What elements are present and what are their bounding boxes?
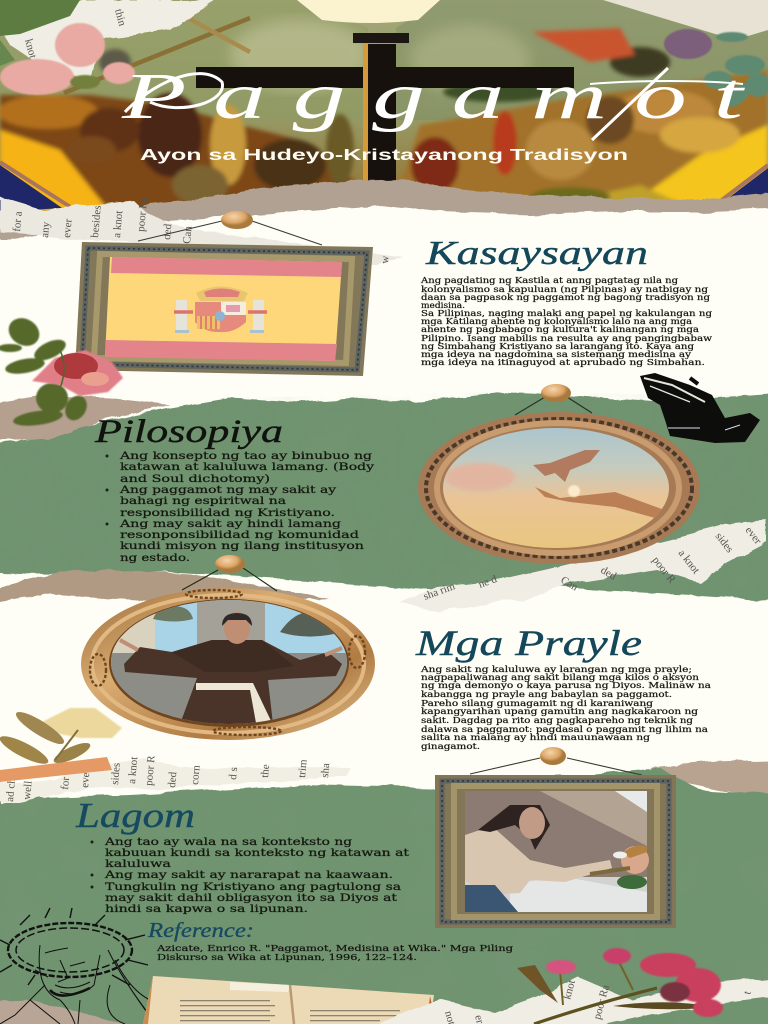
oval frame: dove and hand (418, 412, 700, 564)
heading: pilosopiya: Pilosopiya (94, 414, 283, 450)
paper strip behind flag: besides (89, 205, 104, 238)
coat of arms (174, 286, 267, 333)
icon: purple flower (664, 29, 712, 59)
paper strip right: a knot (676, 547, 702, 576)
paper strip behind flag: Can (181, 225, 195, 244)
text block: mga prayle (420, 664, 711, 751)
photo (465, 791, 649, 912)
text block: kasaysayan: ng Simbahang Kristiyano sa larangang ito. Kaya ang (421, 341, 694, 351)
paper strip with tape left: a knot (126, 756, 140, 784)
green panel: pilosopiya (0, 390, 768, 605)
text block: kasaysayan: daan sa pagpasok ng paggamot ng bagong tradisyon ng (421, 292, 710, 302)
oval frame: friar (81, 588, 375, 740)
text block: kasaysayan: ahente ng pagbabago ng kultura't kalinangan ng mga (421, 324, 699, 334)
torn cream panel: mga prayle (0, 594, 768, 800)
icon: praying hands (640, 373, 760, 443)
bulleted text: pilosopiya: Ang konsepto ng tao ay binubuo ng (119, 450, 372, 462)
bulleted text: lagom (90, 836, 410, 915)
icon: pink flower cluster (0, 23, 135, 95)
paper strip with tape left (0, 754, 350, 803)
text block: kasaysayan: mga ideya na nagdomina sa sistemang medisina ay (421, 349, 691, 359)
icon: jesus line drawing (0, 908, 170, 1024)
hanging pin: friar frame (182, 555, 277, 591)
paper strip with tape left: corn (189, 764, 203, 785)
paper strip with tape left: ded (166, 771, 179, 788)
bulleted text: lagom: kabuuan kundi sa konteksto ng katawan at (105, 847, 410, 859)
text block: kasaysayan: medisina. (421, 300, 465, 310)
paper strip right: Can (558, 574, 580, 594)
paper strip behind flag: poor Ra (135, 196, 150, 232)
bulleted text: pilosopiya: and Soul dichotomy) (120, 473, 270, 485)
paper strip behind flag: ever (61, 218, 75, 238)
text block: kasaysayan (420, 275, 712, 367)
top left paper scraps and leaf: thin (112, 8, 128, 28)
bulleted text: lagom: may sakit dahil obligasyon ito sa Diyos at (105, 892, 398, 904)
paper strip right: sha rim (422, 580, 457, 603)
paper strip right: ded (598, 564, 619, 583)
photo (111, 600, 347, 724)
heading: reference: Reference: (147, 918, 254, 942)
paper strip right: ever (743, 524, 764, 547)
bulleted text: lagom: kaluluwa (105, 858, 171, 870)
text block: mga prayle: kapangyarihan upang gamutin ang nagkakaroon ng (421, 706, 698, 716)
paper strip with tape left: the (259, 764, 272, 778)
paper strip behind flag: ded (161, 223, 174, 240)
heading: kasaysayan: Kasaysayan (425, 235, 648, 272)
bulleted text: lagom: hindi sa kapwa o sa lipunan. (105, 903, 308, 915)
paper strip with tape left: for (59, 776, 72, 790)
paper strip right: poor R (650, 554, 678, 586)
paper strip with tape left: well (21, 780, 35, 800)
tan scrap middle (0, 570, 340, 610)
diagonal wooden cross (64, 13, 250, 93)
top left paper scraps and leaf (0, 0, 215, 80)
paper strip with tape left: ever (79, 768, 93, 788)
text block: mga prayle: kabangga ng prayle ang babaylan sa paggamot. (421, 689, 672, 699)
text block: kasaysayan: Ang pagdating ng Kastila at anng pagtatag nila ng (420, 275, 678, 285)
bulleted text: pilosopiya: Ang may sakit ay hindi lamang (119, 518, 341, 530)
subtitle: Ayon sa Hudeyo-Kristayanong Tradisyon (140, 147, 628, 164)
bulleted text: pilosopiya: ng estado. (120, 552, 190, 564)
tan scrap left (0, 395, 170, 440)
torn tan band below hero (0, 180, 768, 240)
text block: kasaysayan: Pilipino. Isang mabilis na resulta ay ang pangingbabaw (421, 333, 712, 343)
paper strip right (400, 520, 767, 612)
top left paper scraps and leaf: de (55, 34, 69, 47)
hanging pin: dove frame (515, 384, 592, 415)
paper strip behind flag (0, 196, 403, 265)
bulleted text: lagom: Ang tao ay wala na sa konteksto ng (104, 836, 352, 848)
torn tan scrap right (650, 760, 768, 800)
paper strip with tape left: sides (109, 762, 123, 785)
heading: mga prayle: Mga Prayle (415, 623, 642, 663)
bulleted text: lagom: Tungkulin ng Kristiyano ang pagtulong sa (105, 881, 401, 893)
bulleted text: lagom: Ang may sakit ay nararapat na kaawaan. (104, 869, 393, 881)
bulleted text: pilosopiya (106, 450, 374, 564)
citation (156, 943, 513, 962)
icon: pressed pink flowers (517, 948, 723, 1024)
text block: mga prayle: sakit. Dagdag pa rito ang pagkapareho ng teknik ng (421, 715, 693, 725)
icon: dried yellow flower (0, 707, 122, 768)
paper strip behind flag: w (379, 255, 392, 264)
orange tape (0, 757, 112, 782)
text block: mga prayle: Ang sakit ng kaluluwa ay larangan ng mga prayle; (420, 664, 692, 674)
black cross (196, 33, 574, 183)
paper strip bottom right (363, 977, 768, 1024)
picture frame: hanging pin and woman with child (435, 747, 676, 928)
green panel: lagom (0, 768, 768, 1024)
paper strip right: ne d (477, 573, 499, 591)
torn cream panel: kasaysayan (0, 205, 768, 420)
heading: lagom: Lagom (75, 796, 195, 835)
title: Paggamot (121, 60, 746, 133)
paper strip with tape left: ad chi (4, 775, 18, 802)
text block: mga prayle: nagpapaliwanag ang sakit bilang mga kilos o aksyon (421, 672, 700, 682)
paper strip right: sides (713, 530, 736, 555)
bulleted text: pilosopiya: katawan at kaluluwa lamang. (Body (120, 461, 374, 473)
tan scrap bottom left (0, 1000, 160, 1024)
skylight (297, 0, 440, 23)
text block: kasaysayan: mga Katilang ahente ng kolonyalismo lalo na ang mga (421, 316, 692, 326)
bulleted text: pilosopiya: Ang paggamot ng may sakit ay (119, 484, 336, 496)
text block: mga prayle: Pareho silang gumagamit ng di karaniwang (421, 698, 653, 708)
top left paper scraps and leaf: knot (22, 38, 39, 60)
flag (105, 257, 342, 361)
bulleted text: pilosopiya: bahagi ng espiritwal na (120, 495, 286, 507)
paper strip behind flag: for a (11, 211, 25, 232)
ornaments (90, 590, 365, 735)
picture (443, 428, 669, 548)
hero mural: cross and figures (0, 0, 768, 212)
paper strip bottom right: knot (561, 979, 578, 1001)
bulleted text: pilosopiya: resonponsibilidad ng komunidad (120, 529, 359, 541)
text block: mga prayle: salita na malang ay hindi mauunawaan ng (421, 732, 650, 742)
icon: rose with leaves (0, 313, 123, 428)
paper strip bottom right: t (741, 990, 754, 996)
paper strip behind flag: a knot (111, 210, 125, 238)
text block: kasaysayan: Sa Pilipinas, naging malaki ang papel ng kakulangan ng (421, 308, 712, 318)
text block: kasaysayan: kolonyalismo sa kapuluan (ng Pilpinas) ay natbigay ng (421, 284, 708, 294)
bulleted text: pilosopiya: kundi misyon ng ilang institusyon (120, 540, 364, 552)
open old book (143, 976, 436, 1024)
paper strip with tape left: trim (296, 759, 310, 778)
picture frame: spanish flag (75, 242, 373, 376)
text block: kasaysayan: mga ideya na itinaguyod at aprubado ng Simbahan. (421, 357, 705, 367)
text block: mga prayle: ginagamot. (421, 741, 480, 751)
paper strip with tape left: d s (227, 767, 240, 780)
top right open book and plants (603, 0, 768, 111)
paper strip with tape left: poor R (143, 754, 158, 786)
text block: mga prayle: dalawa sa paggamot: pagdasal o paggamit ng lihim na (421, 724, 708, 734)
paper strip bottom right: poor Ra (591, 984, 612, 1021)
citation: Azicate, Enrico R. "Paggamot, Medisina at Wika." Mga Piling (156, 943, 513, 953)
hanging pin: flag frame (138, 211, 322, 245)
paper strip behind flag: any (39, 221, 52, 238)
paper strip with tape left: sha (319, 762, 332, 778)
citation: Diskurso sa Wika at Lipunan, 1996, 122–124. (157, 952, 417, 962)
text block: mga prayle: ng mga demonyo o kaya parusa ng Diyos. Malinaw na (421, 680, 711, 690)
bulleted text: pilosopiya: responsibilidad ng Kristiyano. (120, 507, 335, 519)
